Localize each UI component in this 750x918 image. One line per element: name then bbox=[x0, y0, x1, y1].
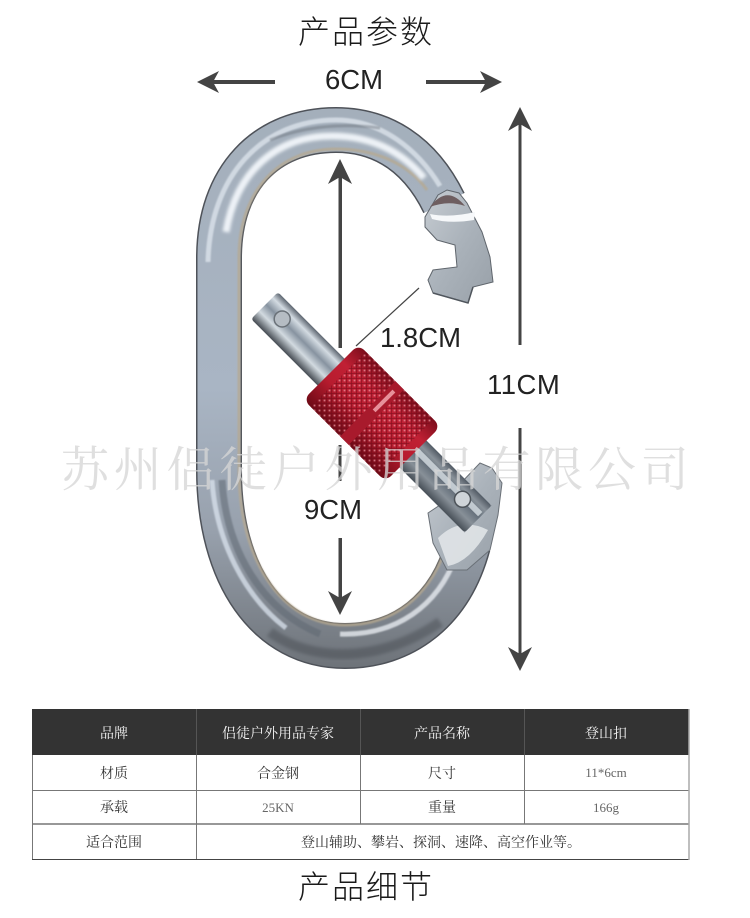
table row: load: 承载 bbox=[100, 799, 128, 816]
table row: load: 166g bbox=[593, 800, 620, 815]
table header row: 品牌 bbox=[100, 725, 128, 742]
table row: material: 尺寸 bbox=[428, 765, 456, 782]
footer heading: 产品细节 bbox=[298, 869, 434, 905]
dimension label: 9CM: 9CM bbox=[304, 494, 362, 525]
specification table bbox=[32, 709, 689, 860]
table row: usage: 适合范围 bbox=[86, 834, 142, 851]
table row: material: 11*6cm bbox=[585, 765, 627, 780]
table grid lines bbox=[32, 709, 689, 860]
table header row bbox=[32, 709, 689, 755]
table row: usage bbox=[86, 834, 581, 851]
dimension label: 1.8CM: 1.8CM bbox=[380, 322, 461, 353]
arrow: 6cm width right bbox=[426, 71, 502, 93]
watermark: 苏州侣徒户外用品有限公司 bbox=[61, 444, 693, 497]
table row: load: 25KN bbox=[262, 800, 294, 815]
table header row: 登山扣 bbox=[585, 725, 627, 742]
title: 产品参数 bbox=[298, 14, 434, 50]
dimension label: 6CM: 6CM bbox=[325, 64, 383, 95]
table row: usage: 登山辅助、攀岩、探洞、速降、高空作业等。 bbox=[301, 834, 581, 851]
upper gate hook bbox=[425, 190, 493, 303]
red knurled sleeve bbox=[303, 344, 441, 482]
arrow: 6cm width left bbox=[197, 71, 275, 93]
table header row: 侣徒户外用品专家 bbox=[222, 725, 334, 742]
arrow: 9cm down bbox=[328, 538, 352, 615]
gate pin bbox=[251, 292, 492, 533]
lower gate hook bbox=[428, 463, 502, 570]
arrow: 11cm height lower bbox=[508, 428, 532, 671]
table row: material: 材质 bbox=[100, 765, 128, 782]
table row: load bbox=[100, 799, 620, 816]
table row: material: 合金钢 bbox=[257, 766, 299, 782]
inner arrow stub behind sleeve bbox=[338, 445, 342, 481]
table row: material bbox=[100, 765, 627, 782]
inner arrow up bbox=[328, 159, 352, 348]
leader line for 1.8CM bbox=[356, 288, 419, 346]
carabiner bbox=[206, 120, 506, 654]
dimension label: 11CM: 11CM bbox=[487, 369, 560, 400]
locking sleeve and pin bbox=[237, 278, 506, 547]
table header row: 产品名称 bbox=[414, 725, 471, 742]
arrow: 11cm height upper bbox=[508, 107, 532, 345]
carabiner body bbox=[206, 120, 468, 654]
table row: load: 重量 bbox=[428, 800, 456, 816]
